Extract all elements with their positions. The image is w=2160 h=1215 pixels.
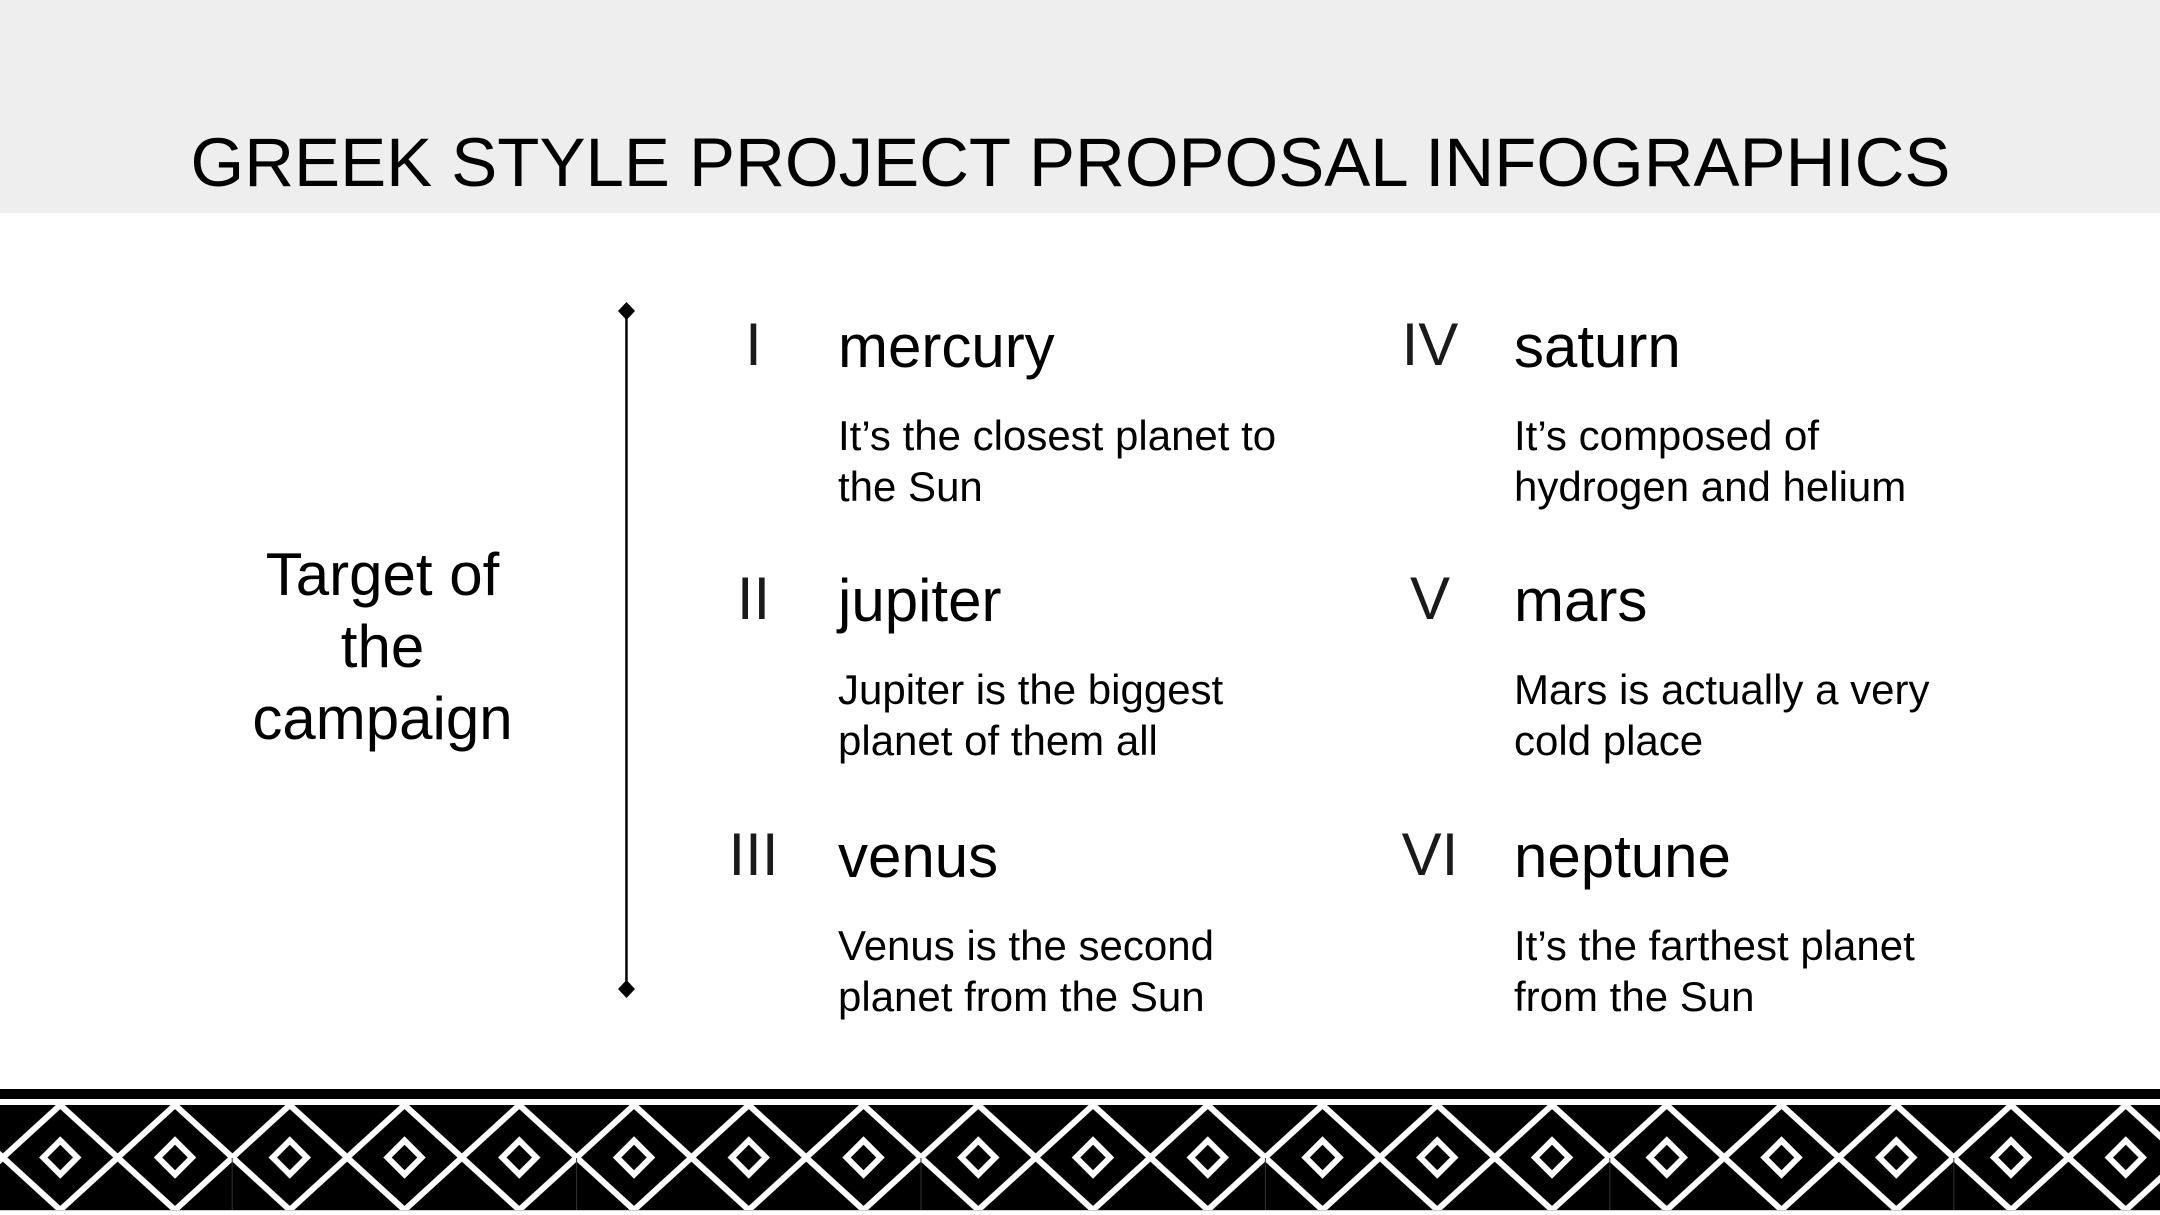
item: venus (728, 821, 1214, 1020)
item: saturn: saturn (1514, 313, 1681, 380)
item: neptune: VI (1402, 821, 1458, 888)
item: venus: venus (838, 823, 998, 890)
vertical divider with diamond ends (618, 302, 635, 998)
item: mars: cold place (1514, 717, 1703, 764)
item: jupiter: planet of them all (838, 717, 1158, 764)
item: jupiter (737, 565, 1224, 764)
item: venus: Venus is the second (838, 922, 1214, 969)
header band (0, 0, 2160, 213)
item: mars: Mars is actually a very (1514, 666, 1929, 713)
item: mercury (745, 311, 1276, 510)
item: saturn: IV (1402, 311, 1458, 378)
item: neptune: neptune (1514, 823, 1731, 890)
campaign label: Target of (266, 541, 500, 608)
item: saturn: hydrogen and helium (1514, 463, 1906, 510)
item: mars: mars (1514, 567, 1647, 634)
item: mars (1410, 565, 1929, 764)
item: mercury: I (745, 311, 762, 378)
title: GREEK STYLE PROJECT PROPOSAL INFOGRAPHICS (191, 124, 1950, 201)
campaign label: the (341, 613, 424, 680)
item: jupiter: II (737, 565, 770, 632)
item: saturn: It’s composed of (1514, 412, 1819, 459)
item: jupiter: Jupiter is the biggest (838, 666, 1224, 713)
item: neptune: from the Sun (1514, 973, 1754, 1020)
campaign label: campaign (252, 685, 513, 752)
item: saturn (1402, 311, 1906, 510)
item: neptune: It’s the farthest planet (1514, 922, 1915, 969)
item: mercury: mercury (838, 313, 1055, 380)
decorative border (0, 1089, 2160, 1211)
item: mars: V (1410, 565, 1450, 632)
item: venus: III (728, 821, 779, 888)
item: mercury: the Sun (838, 463, 983, 510)
item: venus: planet from the Sun (838, 973, 1205, 1020)
item: jupiter: jupiter (836, 567, 1001, 634)
item: mercury: It’s the closest planet to (838, 412, 1276, 459)
item: neptune (1402, 821, 1915, 1020)
